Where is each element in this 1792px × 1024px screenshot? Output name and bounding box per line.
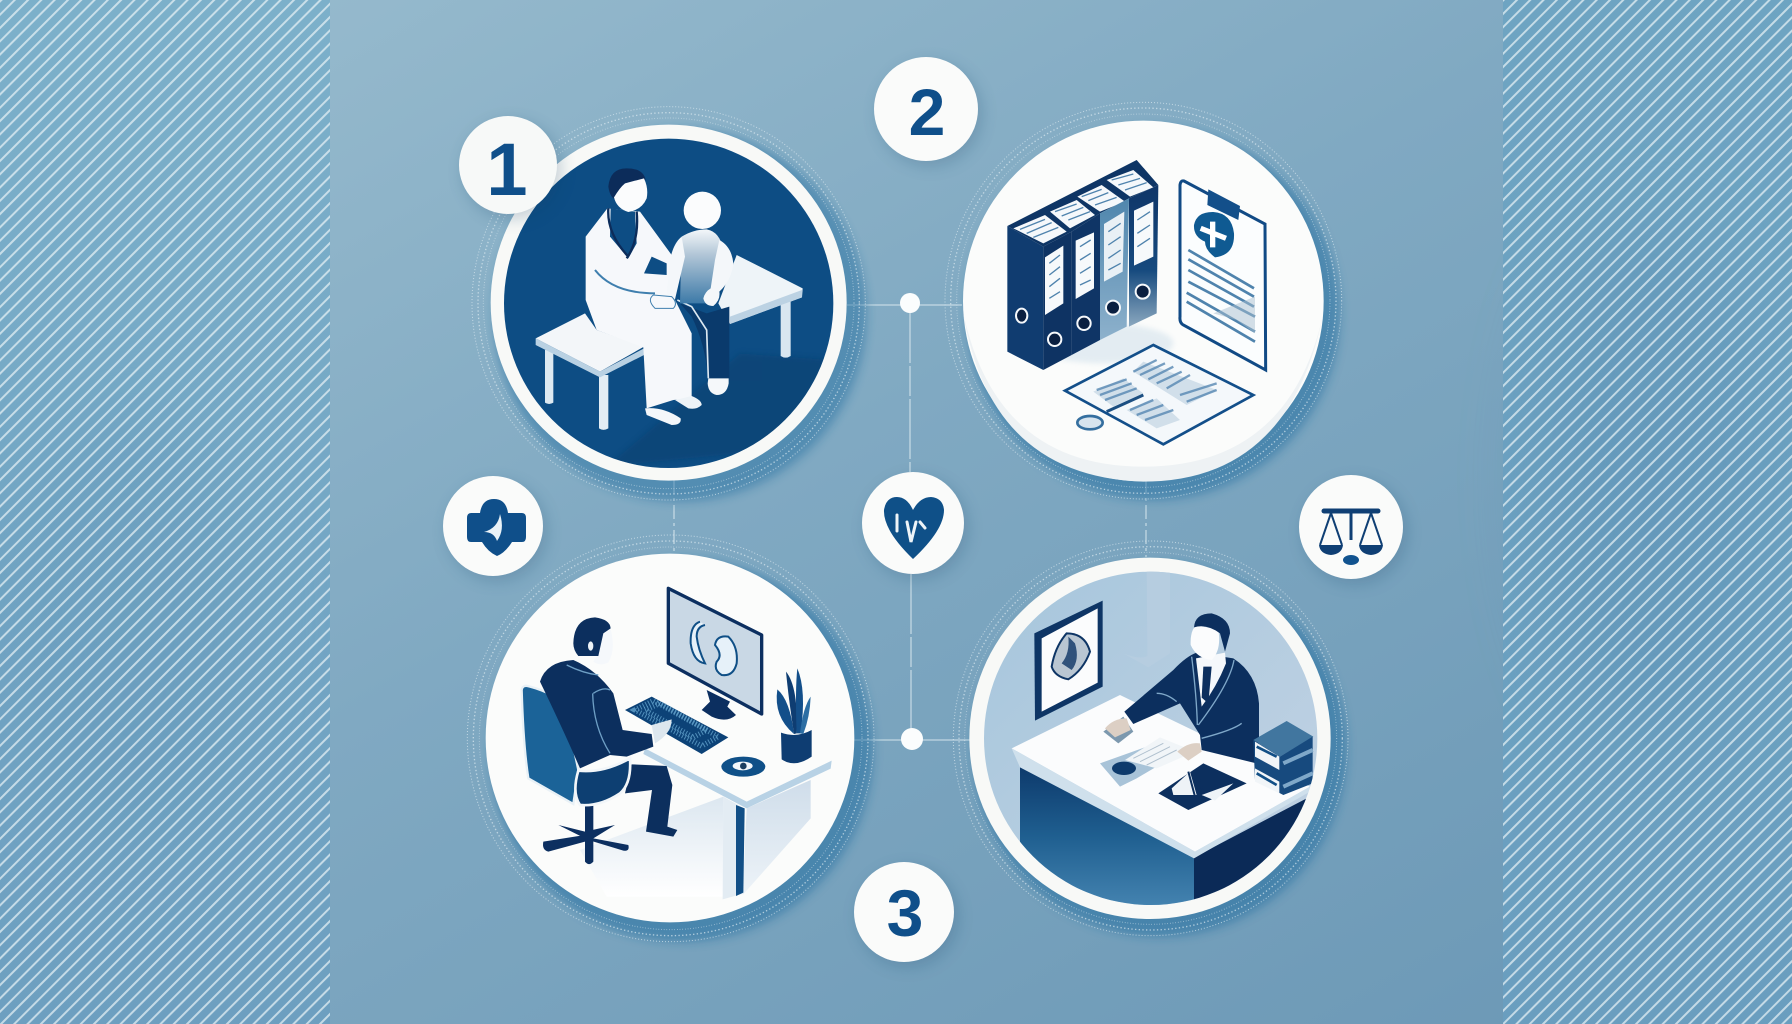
seated man and chair bbox=[522, 617, 677, 864]
stack of books bbox=[1253, 721, 1313, 795]
icon badge: heart with pulse bbox=[862, 472, 968, 579]
number badge 1 bbox=[459, 116, 561, 219]
icon badge: medical cross bbox=[443, 476, 547, 581]
keyboard bbox=[625, 697, 728, 754]
number badge 2: 2 bbox=[909, 75, 945, 149]
step 2 circle: binders and records bbox=[945, 102, 1342, 500]
number badge 3: 3 bbox=[887, 876, 923, 950]
rear bench bbox=[718, 255, 803, 358]
left striped side panel bbox=[0, 0, 330, 1024]
connector lines and nodes bbox=[674, 293, 1146, 750]
front bench bbox=[536, 313, 644, 430]
man in suit bbox=[1124, 613, 1259, 764]
wall picture bbox=[1034, 601, 1103, 721]
wall column bbox=[1146, 572, 1170, 590]
desk bbox=[1012, 695, 1310, 907]
clipboard bbox=[1180, 181, 1266, 370]
monitor bbox=[668, 588, 762, 720]
step 3 circle: analyst at workstation bbox=[467, 535, 874, 942]
icon badge: scales of justice bbox=[1299, 475, 1407, 584]
number badge 2 bbox=[874, 57, 982, 166]
hands and paperwork bbox=[1100, 717, 1202, 787]
patient figure bbox=[650, 192, 733, 395]
floor shading bbox=[580, 796, 724, 862]
open document and stethoscope bbox=[1065, 345, 1253, 444]
step 4 circle: legal expert at desk bbox=[953, 541, 1348, 937]
scales tablet on desk bbox=[1158, 763, 1247, 810]
step 1 circle: doctor consulting patient bbox=[472, 107, 867, 502]
doctor figure bbox=[586, 168, 702, 425]
number badge 3 bbox=[854, 862, 958, 967]
right striped side panel bbox=[1503, 0, 1792, 1024]
number badge 1: 1 bbox=[486, 128, 528, 211]
coaster bbox=[721, 757, 765, 777]
potted plant bbox=[777, 668, 812, 763]
binders bbox=[1007, 160, 1173, 370]
desk bbox=[643, 748, 832, 899]
